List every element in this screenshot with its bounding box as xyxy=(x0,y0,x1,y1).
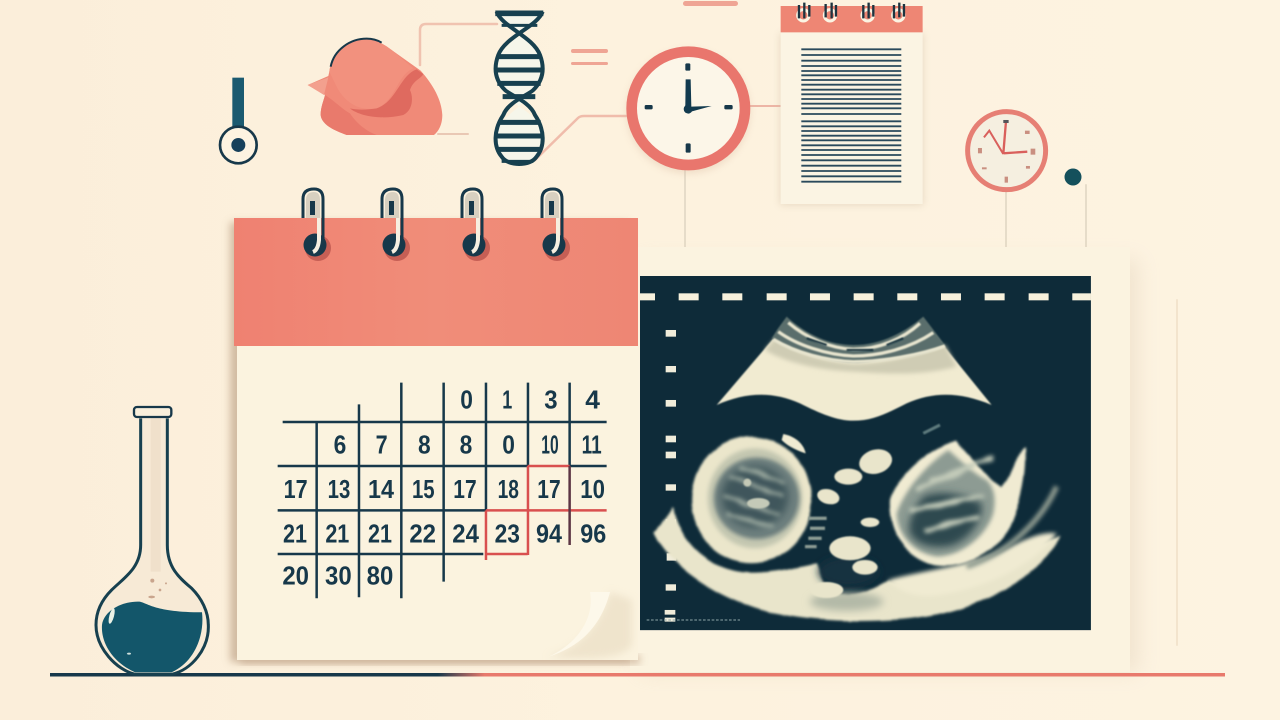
row 4 dates: 22 xyxy=(409,518,436,548)
ring 3 xyxy=(462,189,490,261)
row 3 dates: 17 xyxy=(453,474,477,504)
row 4 dates: 21 xyxy=(368,518,392,548)
row 1 dates: 0 xyxy=(460,385,473,415)
row 2 dates: 10 xyxy=(541,429,559,459)
ultrasound: left head xyxy=(692,434,827,563)
row 3 dates: 13 xyxy=(328,474,350,504)
ring 1 xyxy=(303,189,331,261)
panel: ultrasound frame xyxy=(630,247,1138,672)
row 5 dates: 80 xyxy=(367,561,393,591)
row 3 dates xyxy=(284,474,605,504)
calendar page curl xyxy=(547,592,632,659)
ultrasound: lower crescent xyxy=(653,507,1060,621)
row 5 dates: 30 xyxy=(325,561,352,591)
notepad rings xyxy=(798,3,904,21)
row 4 dates: 24 xyxy=(452,518,479,548)
row 1 dates: 3 xyxy=(544,385,558,415)
baseline xyxy=(50,673,1225,676)
decorative dashes xyxy=(571,1,738,65)
notepad header xyxy=(781,6,923,32)
ultrasound: right head xyxy=(890,425,1025,566)
icon: teal dot xyxy=(1064,168,1082,186)
row 5 dates xyxy=(282,561,393,591)
row 4 dates: 21 xyxy=(325,518,349,548)
row 1 dates: 4 xyxy=(585,385,601,415)
panel: ultrasound image xyxy=(635,276,1092,630)
row 3 dates: 17 xyxy=(537,474,561,504)
row 2 dates: 7 xyxy=(376,429,388,459)
ultrasound scale: left ticks xyxy=(665,330,676,622)
row 4 dates: 21 xyxy=(283,518,307,548)
calendar bottom shadow xyxy=(240,655,640,664)
calendar rings xyxy=(303,189,570,261)
icon: organ xyxy=(308,39,442,135)
grid lines xyxy=(278,383,607,598)
row 2 dates: 8 xyxy=(418,429,431,459)
row 2 dates: 11 xyxy=(582,429,602,459)
row 3 dates: 18 xyxy=(498,474,519,504)
icon: DNA helix xyxy=(495,12,544,164)
row 4 dates xyxy=(283,518,606,548)
icon: flask xyxy=(96,407,208,674)
calendar header xyxy=(234,218,638,346)
calendar page xyxy=(237,346,638,660)
row 4 dates: 96 xyxy=(580,518,606,548)
notepad text lines xyxy=(801,49,901,182)
row 1 dates xyxy=(460,385,601,415)
row 2 dates: 8 xyxy=(460,429,472,459)
ring 2 xyxy=(382,189,410,261)
row 2 dates xyxy=(334,429,602,459)
ultrasound: central dark gap xyxy=(818,557,878,587)
row 2 dates: 0 xyxy=(502,429,515,459)
row 2 dates: 6 xyxy=(334,429,346,459)
row 3 dates: 14 xyxy=(368,474,394,504)
ultrasound: central bright spots xyxy=(810,446,895,598)
icon: stethoscope xyxy=(220,78,257,163)
ultrasound scale: top dashes xyxy=(635,293,1092,300)
connector lines xyxy=(420,24,1177,645)
row 3 dates: 15 xyxy=(412,474,435,504)
calendar shadow xyxy=(230,222,630,662)
panel: calendar xyxy=(234,189,640,664)
ultrasound: upper wedge xyxy=(717,317,992,421)
row 3 dates: 10 xyxy=(580,474,605,504)
row 3 dates: 17 xyxy=(284,474,308,504)
row 1 dates: 1 xyxy=(502,385,512,415)
row 4 dates: 94 xyxy=(536,518,562,548)
calendar grid and dates xyxy=(278,383,607,598)
icon: large clock xyxy=(627,50,750,173)
icon: small clock xyxy=(968,112,1046,190)
ring 4 xyxy=(542,189,570,261)
icon: notepad xyxy=(780,3,923,205)
row 4 dates: 23 xyxy=(495,518,520,548)
row 5 dates: 20 xyxy=(282,561,309,591)
